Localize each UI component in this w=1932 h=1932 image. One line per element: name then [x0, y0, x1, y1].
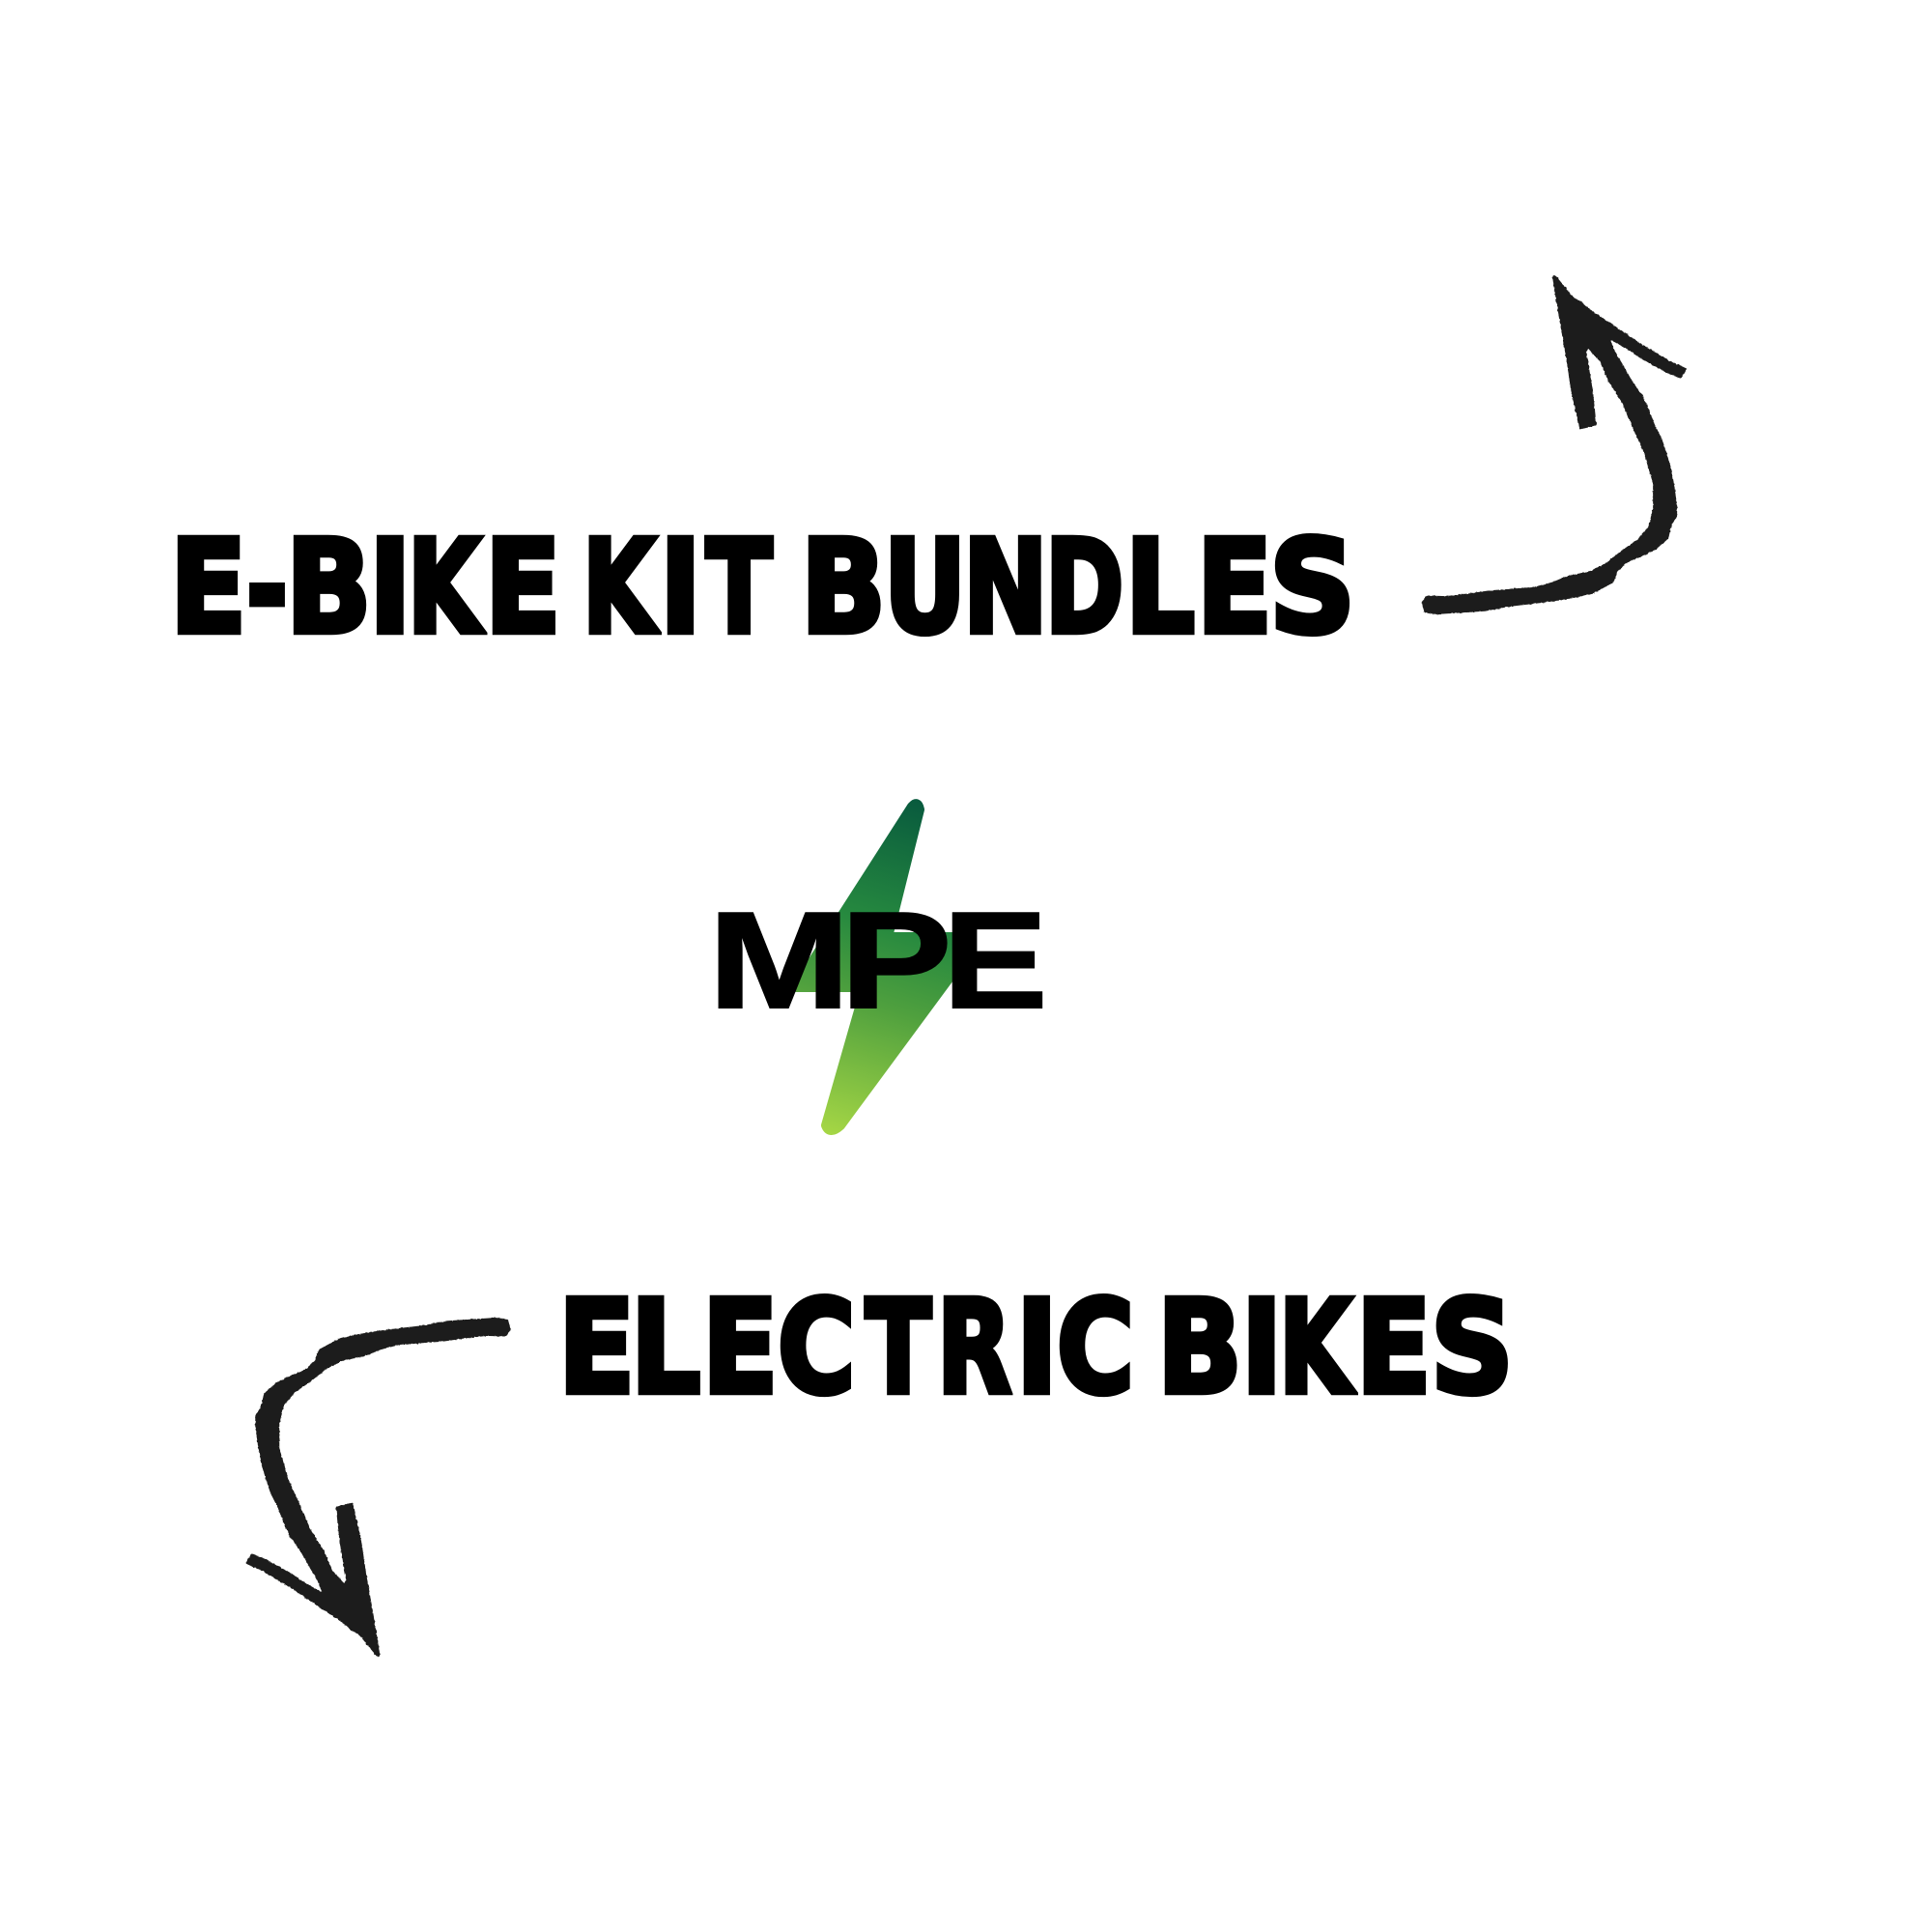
- heading: E-Bike Kit Bundles: K: [408, 514, 481, 663]
- logo wordmark: MPE: E: [943, 884, 1047, 1037]
- heading: E-Bike Kit Bundles: K: [582, 514, 655, 663]
- logo wordmark: MPE: P: [840, 884, 952, 1037]
- heading: Electric Bikes: I: [1016, 1274, 1058, 1423]
- heading: E-Bike Kit Bundles: N: [963, 514, 1048, 663]
- heading: Electric Bikes: E: [558, 1274, 635, 1423]
- heading: Electric Bikes: B: [1157, 1274, 1242, 1423]
- heading: Electric Bikes: L: [631, 1274, 700, 1423]
- heading: E-Bike Kit Bundles: L: [1125, 514, 1194, 663]
- heading: E-Bike Kit Bundles: I: [369, 514, 412, 663]
- heading: Electric Bikes: E: [702, 1274, 779, 1423]
- heading: Electric Bikes: C: [778, 1274, 856, 1423]
- logo wordmark: MPE: [708, 884, 1047, 1037]
- heading: E-Bike Kit Bundles: E: [170, 514, 246, 663]
- heading: E-Bike Kit Bundles: S: [1269, 514, 1355, 663]
- heading: E-Bike Kit Bundles: E: [1197, 514, 1272, 663]
- heading: Electric Bikes: R: [937, 1274, 1011, 1423]
- logo: MPE with green lightning bolt: [708, 799, 1047, 1135]
- heading: Electric Bikes: C: [1057, 1274, 1134, 1423]
- icon: green lightning bolt: [795, 799, 952, 1135]
- heading: Electric Bikes: E: [1356, 1274, 1431, 1423]
- heading: Electric Bikes: [558, 1274, 1513, 1423]
- heading: Electric Bikes: S: [1431, 1274, 1513, 1423]
- heading: E-Bike Kit Bundles: [170, 514, 1355, 663]
- heading: E-Bike Kit Bundles: -: [246, 514, 288, 663]
- heading: Electric Bikes: T: [866, 1274, 931, 1423]
- heading: Electric Bikes: I: [1240, 1274, 1282, 1423]
- heading: Electric Bikes: K: [1279, 1274, 1351, 1423]
- heading: E-Bike Kit Bundles: I: [660, 514, 701, 663]
- heading: E-Bike Kit Bundles: B: [286, 514, 372, 663]
- heading: E-Bike Kit Bundles: T: [706, 514, 773, 663]
- heading: E-Bike Kit Bundles: D: [1045, 514, 1124, 663]
- heading: E-Bike Kit Bundles: U: [883, 514, 965, 663]
- heading: E-Bike Kit Bundles: E: [485, 514, 561, 663]
- heading: E-Bike Kit Bundles: B: [801, 514, 886, 663]
- logo wordmark: MPE: M: [708, 884, 851, 1037]
